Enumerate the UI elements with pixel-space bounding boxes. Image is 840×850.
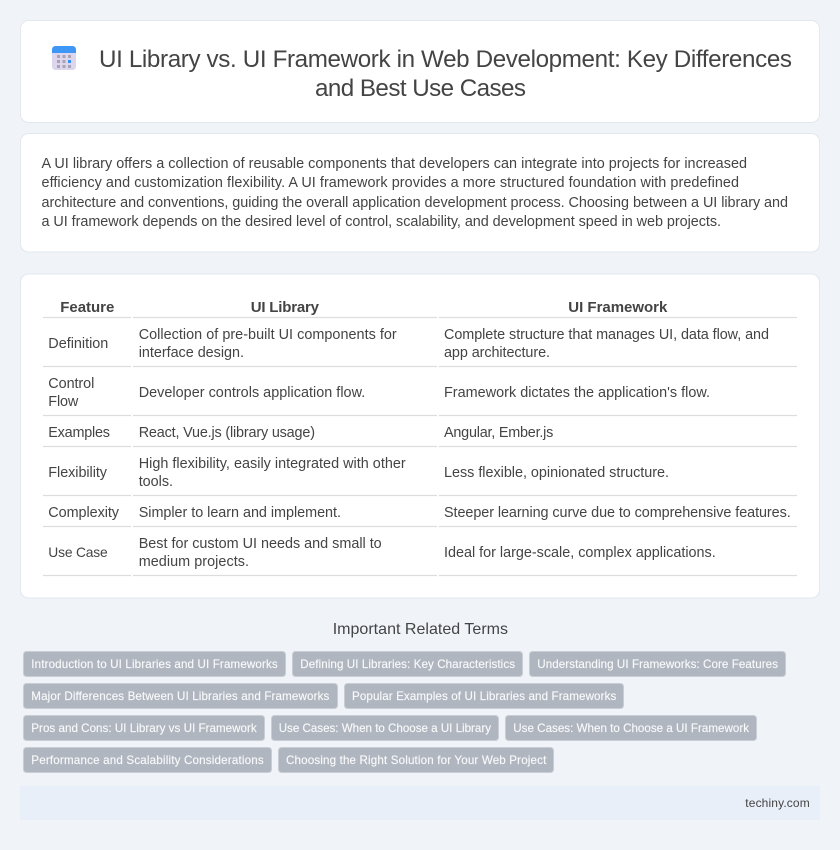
- row: definition: Collection of pre-built UI components for: [139, 327, 397, 343]
- tag: [278, 748, 554, 772]
- row: use case: [48, 536, 716, 570]
- row: examples: Examples: [48, 425, 110, 441]
- tag: Choosing the Right Solution for Your Web Project: [286, 754, 547, 767]
- row: control flow: Control: [48, 376, 94, 392]
- intro paragraph: a UI framework depends on the desired level of control, scalability, and development speed in web projects.: [42, 214, 721, 230]
- row: control flow: Framework dictates the application's flow.: [444, 385, 710, 401]
- row: use case: Ideal for large-scale, complex applications.: [444, 545, 716, 561]
- footer credit: techiny.com: [745, 796, 810, 810]
- row: flexibility: tools.: [139, 474, 173, 490]
- tag: [24, 684, 338, 708]
- row: complexity: [48, 505, 791, 521]
- row: flexibility: [48, 456, 669, 490]
- table header row: [60, 299, 668, 316]
- row: examples: React, Vue.js (library usage): [139, 425, 315, 441]
- row: definition: [48, 327, 769, 361]
- row: control flow: [48, 376, 710, 410]
- icon: calendar grid: [52, 46, 76, 70]
- table header row: UI Library: [251, 299, 320, 316]
- title: and Best Use Cases: [315, 75, 526, 102]
- row: control flow: Flow: [48, 394, 79, 410]
- tag: Introduction to UI Libraries and UI Frameworks: [31, 658, 278, 671]
- related term tags: [24, 652, 786, 772]
- tag: Major Differences Between UI Libraries and Frameworks: [31, 690, 330, 703]
- table header row: Feature: [60, 299, 114, 316]
- title: [99, 46, 792, 102]
- row: flexibility: High flexibility, easily integrated with other: [139, 456, 406, 472]
- row: examples: [48, 425, 553, 441]
- row: definition: Complete structure that manages UI, data flow, and: [444, 327, 769, 343]
- tag: Understanding UI Frameworks: Core Features: [537, 658, 778, 671]
- intro paragraph: architecture and conventions, guiding the overall application development process. Choosing between a UI library and: [42, 195, 788, 211]
- row: definition: app architecture.: [444, 345, 550, 361]
- tag: [24, 652, 286, 676]
- tag: Popular Examples of UI Libraries and Frameworks: [352, 690, 617, 703]
- row: use case: Best for custom UI needs and small to: [139, 536, 382, 552]
- header panel: [20, 20, 820, 122]
- row: complexity: Simpler to learn and implement.: [139, 505, 341, 521]
- tag: Use Cases: When to Choose a UI Framework: [513, 722, 749, 735]
- intro paragraph: efficiency and customization flexibility. A UI framework provides a more structured foundation with predefined: [42, 175, 739, 191]
- row: flexibility: Flexibility: [48, 465, 108, 481]
- tag: Defining UI Libraries: Key Characteristics: [300, 658, 515, 671]
- row: examples: Angular, Ember.js: [444, 425, 553, 441]
- tag: [24, 716, 264, 740]
- row: definition: interface design.: [139, 345, 244, 361]
- table header row: UI Framework: [568, 299, 668, 316]
- tag: [272, 716, 498, 740]
- tag: [292, 652, 522, 676]
- tag: [24, 748, 272, 772]
- row: complexity: Complexity: [48, 505, 120, 521]
- intro paragraph: [42, 156, 788, 230]
- tag: [530, 652, 786, 676]
- row: complexity: Steeper learning curve due to comprehensive features.: [444, 505, 791, 521]
- intro paragraph: A UI library offers a collection of reusable components that developers can integrate into projects for increased: [42, 156, 747, 172]
- tag: Use Cases: When to Choose a UI Library: [279, 722, 491, 735]
- row: flexibility: Less flexible, opinionated structure.: [444, 465, 669, 481]
- row: definition: Definition: [48, 336, 108, 352]
- panel: introduction: [20, 134, 820, 252]
- tag: [344, 684, 624, 708]
- row: use case: medium projects.: [139, 554, 249, 570]
- footer: [20, 786, 820, 820]
- row: control flow: Developer controls application flow.: [139, 385, 365, 401]
- title: UI Library vs. UI Framework in Web Development: Key Differences: [99, 46, 792, 73]
- panel: comparison table: [20, 274, 820, 598]
- tag: [506, 716, 756, 740]
- tag: Performance and Scalability Considerations: [31, 754, 264, 767]
- row: use case: Use Case: [48, 545, 108, 560]
- heading: important related terms: Important Related Terms: [333, 621, 508, 638]
- tag: Pros and Cons: UI Library vs UI Framework: [31, 722, 257, 735]
